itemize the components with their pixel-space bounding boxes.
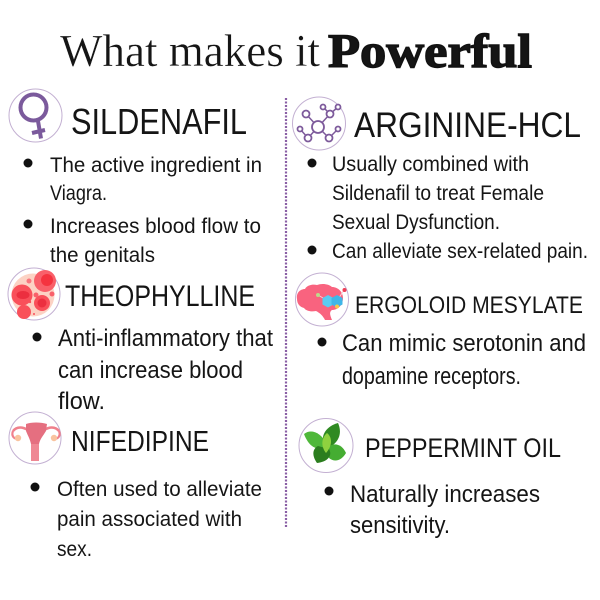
column divider — [285, 98, 287, 527]
text block: peppermint bullet: sensitivity. — [350, 512, 450, 539]
heading: sildenafil: SILDENAFIL — [71, 101, 247, 142]
text block: ergoloid bullet: Can mimic serotonin and — [342, 330, 586, 357]
text block: arginine bullets: Sexual Dysfunction. — [332, 211, 500, 234]
text block: sildenafil bullets: Increases blood flow to — [50, 215, 261, 238]
title — [60, 25, 532, 78]
heading: arginine-hcl: ARGININE-HCL — [354, 106, 581, 145]
text block: ergoloid bullet — [318, 330, 586, 390]
icon: molecule — [292, 97, 346, 150]
text block: sildenafil bullets: the genitals — [50, 244, 155, 267]
text block: peppermint bullet — [324, 481, 540, 539]
text block: peppermint bullet: Naturally increases — [350, 481, 540, 508]
text block: nifedipine bullet: Often used to alleviate — [57, 478, 262, 501]
title: Powerful — [328, 25, 532, 78]
heading: peppermint oil: PEPPERMINT OIL — [365, 433, 561, 463]
panel: peppermint oil — [299, 418, 561, 539]
panel: ergoloid mesylate — [296, 273, 586, 390]
text block: theophylline bullet: flow. — [58, 388, 105, 415]
icon: mint leaves — [299, 418, 353, 472]
text block: arginine bullets — [308, 153, 588, 263]
heading: nifedipine: NIFEDIPINE — [71, 426, 209, 458]
icon: brain — [296, 273, 348, 326]
panel: theophylline — [8, 268, 273, 415]
text block: sildenafil bullets — [24, 154, 262, 267]
text block: ergoloid bullet: dopamine receptors. — [342, 363, 521, 390]
text block: arginine bullets: Sildenafil to treat Female — [332, 182, 544, 205]
text block: theophylline bullet — [32, 325, 273, 415]
panel: nifedipine — [9, 412, 262, 561]
icon: female symbol — [9, 89, 62, 142]
text block: theophylline bullet: Anti-inflammatory that — [58, 325, 273, 352]
panel: arginine-hcl — [292, 97, 588, 263]
text block: theophylline bullet: can increase blood — [58, 357, 243, 384]
text block: nifedipine bullet: pain associated with — [57, 508, 242, 531]
panel: sildenafil — [9, 89, 262, 267]
title: What makes it — [60, 26, 320, 76]
text block: sildenafil bullets: The active ingredient in — [50, 154, 262, 177]
heading: theophylline: THEOPHYLLINE — [65, 280, 255, 313]
icon: uterus — [9, 412, 61, 464]
text block: arginine bullets: Usually combined with — [332, 153, 529, 176]
text block: nifedipine bullet: sex. — [57, 538, 92, 561]
icon: blood cells — [8, 268, 60, 320]
text block: sildenafil bullets: Viagra. — [50, 182, 107, 205]
text block: nifedipine bullet — [30, 478, 262, 561]
